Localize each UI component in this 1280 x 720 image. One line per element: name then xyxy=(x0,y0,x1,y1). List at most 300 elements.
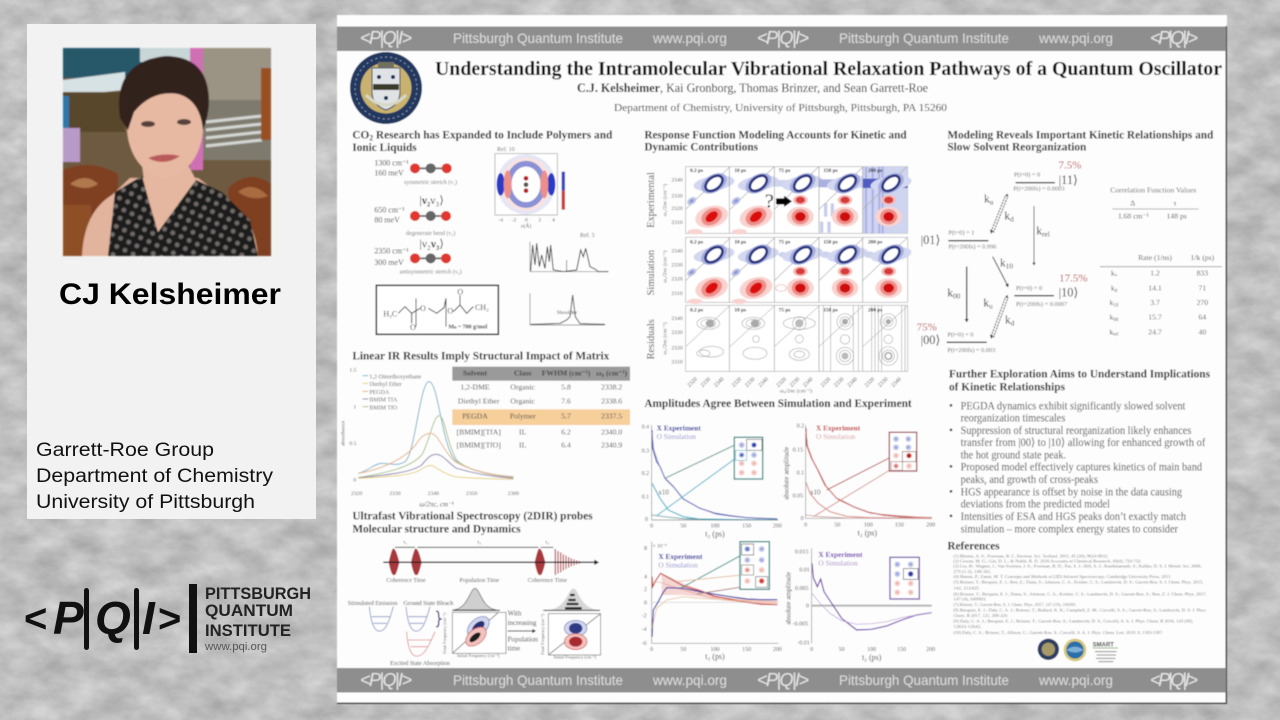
header band: Pittsburgh Quantum Institute xyxy=(453,30,623,46)
chart: IR absorbance spectra: 2330 xyxy=(389,491,401,497)
table: correlation function values xyxy=(1110,186,1198,220)
logo: Pittsburgh Quantum Institute: > xyxy=(158,597,181,641)
heading: further exploration: Further Exploration Aims to Understand Implications xyxy=(949,366,1210,380)
chart: IR absorbance spectra: Diethyl Ether xyxy=(369,382,402,388)
table: rate constants: d xyxy=(1115,289,1118,294)
header band: www.pqi.org xyxy=(1038,30,1113,46)
PEGDA structure box: H₃C xyxy=(383,310,397,319)
title: Understanding the Intramolecular Vibrational Relaxation Pathways of a Quantum Oscillator xyxy=(435,58,1222,80)
heading: 2DIR xyxy=(352,509,593,535)
bullet list: HGS appearance is offset by noise in the data causing xyxy=(961,486,1182,498)
panel: response function modeling xyxy=(644,127,912,395)
bullet list: the hot ground state peak. xyxy=(961,449,1066,461)
references list: (2) Cowan, M. G.; Gin, D. L.; & Noble, R. D. 2016 Accounts of Chemical Research, 49(4), 724-732. xyxy=(953,558,1142,564)
chart: Ref. 10 2D map xyxy=(495,146,565,229)
diagram: energy level scheme: |11⟩ xyxy=(1059,173,1078,187)
bullet list: Suppression of structural reorganization likely enhances xyxy=(961,425,1191,437)
table: solvent properties: IL xyxy=(519,427,527,436)
CO2 vibrational modes: 300 meV xyxy=(374,258,404,267)
chart: IR absorbance spectra: PEGDA xyxy=(369,390,390,396)
chart: red diagonal amplitudes: 0 xyxy=(801,516,804,522)
chart: purple amplitudes: X Experiment xyxy=(818,550,863,559)
table: rate constants: rel xyxy=(1113,333,1119,338)
row: residual 2D spectra: 2330 xyxy=(833,376,846,389)
PEGDA structure box: O xyxy=(420,304,426,313)
row: simulation 2D spectra: 2320 xyxy=(671,277,683,283)
chart: blue diagonal amplitudes: O Simulation xyxy=(657,432,696,441)
chart: 2D spectrum after xyxy=(540,588,601,660)
table: solvent properties xyxy=(452,367,630,450)
table: solvent properties: 2340.0 xyxy=(601,427,622,436)
chart: red diagonal amplitudes: 100 xyxy=(864,522,873,528)
row: residual 2D spectra: 200 ps xyxy=(868,307,882,313)
table: rate constants: 15.7 xyxy=(1148,313,1162,322)
chart: 2D spectrum before: Final Frequency (cm⁻¹) xyxy=(442,612,447,654)
references list: 12633-12642. xyxy=(953,624,982,629)
header band xyxy=(337,26,1226,51)
funder logos xyxy=(1038,639,1118,662)
chart: cross-peak amplitudes: × 10⁻³ xyxy=(653,544,667,550)
row: simulation 2D spectra: 10 ps xyxy=(734,239,746,245)
CO2 vibrational modes: 2350 cm⁻¹ xyxy=(374,247,409,256)
chart: Ref. 10 2D map: -2 xyxy=(512,217,517,223)
chart: red diagonal amplitudes: 0.05 xyxy=(793,494,803,500)
panel: amplitudes xyxy=(642,396,935,662)
diagram: energy level scheme: rel xyxy=(1042,229,1050,238)
annotation: question mark and arrow xyxy=(765,191,792,213)
funder logos: SMART xyxy=(1093,643,1114,649)
panel: poster xyxy=(337,15,1227,704)
chart: IR absorbance spectra: absorbance xyxy=(341,420,347,446)
diagram: 2DIR pulse sequence xyxy=(383,539,599,584)
chart: red diagonal amplitudes: 150 xyxy=(895,522,904,528)
row: residual 2D spectra: ω₃/2πc (cm⁻¹) xyxy=(780,388,812,395)
chart: IR absorbance spectra: 2360 xyxy=(508,491,519,497)
header band: www.pqi.org xyxy=(652,30,727,46)
table: solvent properties: ω₀ (cm⁻¹) xyxy=(596,369,628,378)
chart: cross-peak amplitudes: -4 xyxy=(642,627,647,633)
diagram: energy level scheme: 75% xyxy=(917,321,937,333)
chart: Ref. 5 spectrum (b) xyxy=(530,293,605,325)
references list: (8) Berquist, E. J.; Daly, C. A. J.; Brinzer, T.; Bullard, K. K.; Campbell, Z. M.; Corcelli, S. A.; Garrett-Roe, S.; Lambrecht, D. S. J. Phys. xyxy=(953,608,1207,614)
diagram: energy level scheme: k xyxy=(1036,225,1042,237)
table: rate constants: 71 xyxy=(1199,284,1206,293)
references list: (7) Brinzer, T.; Garrett-Roe, S. J. Chem. Phys. 2017, 147 (19), 194301. xyxy=(953,602,1077,608)
chart: purple amplitudes xyxy=(785,548,935,662)
chart: purple amplitudes: 0.015 xyxy=(795,549,808,555)
heading: CO2 research: 2 xyxy=(369,133,373,142)
table: solvent properties: 2340.9 xyxy=(601,441,622,450)
diagram: 2DIR pulse sequence: t₁ xyxy=(404,539,407,545)
bullet list: • xyxy=(949,486,953,498)
logo: Pittsburgh Quantum Institute: < xyxy=(24,597,47,641)
affiliation text xyxy=(36,440,274,513)
bullet list: Proposed model effectively captures kinetics of main band xyxy=(961,462,1202,474)
row labels: ω₁/2πc (cm⁻¹) xyxy=(662,322,669,354)
diagram: energy level scheme: k xyxy=(983,298,989,310)
table: solvent properties: Organic xyxy=(510,396,536,405)
PEGDA structure box xyxy=(376,285,498,334)
references list: Chem. B 2017, 121, 208-220. xyxy=(953,613,1008,619)
chart: IR absorbance spectra: BMIM TfA xyxy=(369,397,398,404)
diagram: 2DIR pulse sequence: t₂ xyxy=(478,539,481,545)
affiliation text: University of Pittsburgh xyxy=(36,492,255,513)
chart: red diagonal amplitudes: 200 xyxy=(926,522,935,528)
panel: linear IR xyxy=(341,348,630,667)
heading: kinetic model: Slow Solvent Reorganization xyxy=(947,140,1087,154)
logo: Pittsburgh Quantum Institute xyxy=(24,584,311,653)
diagram: energy level scheme: k xyxy=(1005,314,1011,326)
chart: cross-peak amplitudes: t₂ (ps) xyxy=(705,652,725,661)
diagram: energy level scheme: |01⟩ xyxy=(921,233,940,247)
panel: CO2 research xyxy=(352,127,613,334)
chart: blue diagonal amplitudes: 50 xyxy=(680,524,686,530)
logo: Pittsburgh Quantum Institute: QUANTUM xyxy=(205,601,293,620)
diagram: energy level scheme: |10⟩ xyxy=(1059,286,1078,300)
PEGDA structure box: O xyxy=(457,287,463,296)
chart: blue diagonal amplitudes: 0.3 xyxy=(642,448,649,454)
diagram: energy level scheme: u xyxy=(990,198,994,207)
affiliation text: Department of Chemistry xyxy=(36,466,274,487)
authors: C.J. Kelsheimer, Kai Gronborg, Thomas Brinzer, and Sean Garrett-Roe xyxy=(577,80,928,95)
chart: blue diagonal amplitudes: 0.1 xyxy=(642,494,649,500)
row labels: Simulation xyxy=(646,250,657,295)
table: rate constants: 14.1 xyxy=(1148,284,1162,293)
arrow: with increasing population time: increasing xyxy=(508,619,537,627)
table: rate constants: 3.7 xyxy=(1150,298,1160,307)
chart: purple amplitudes: 0.01 xyxy=(799,568,810,574)
header band: <P|Q|I> xyxy=(360,28,412,48)
chart: cross-peak amplitudes: 200 xyxy=(773,647,782,653)
table: rate constants: 00 xyxy=(1113,318,1119,323)
footer band: <P|Q|I> xyxy=(360,670,412,690)
table: solvent properties: 2338.6 xyxy=(601,396,622,405)
bullet list: • xyxy=(949,511,953,523)
chart: purple amplitudes: 100 xyxy=(867,647,876,653)
table: solvent properties: Solvent xyxy=(463,369,488,378)
diagram: 2DIR pulse sequence: Coherence Time xyxy=(528,578,567,584)
row: residual 2D spectra: 2330 xyxy=(789,376,801,389)
table: solvent properties: Class xyxy=(514,369,531,378)
PEGDA structure box: Mₙ ~ 700 g/mol xyxy=(448,324,488,330)
heading: CO2 research: Ionic Liquids xyxy=(352,140,417,154)
diagram: energy level scheme: 10 xyxy=(1006,262,1013,271)
diagram: energy level scheme: P(t=0) = 0 xyxy=(947,332,973,339)
row: residual 2D spectra: 2310 xyxy=(671,359,683,365)
chart: IR absorbance spectra: ω/2πc, cm⁻¹ xyxy=(419,501,454,509)
table: solvent properties: Diethyl Ether xyxy=(458,396,500,405)
header band: Pittsburgh Quantum Institute xyxy=(839,30,1009,46)
row: residual 2D spectra: 0.2 ps xyxy=(690,307,703,313)
chart: purple amplitudes: 50 xyxy=(839,647,845,653)
chart: cross-peak amplitudes: 2 xyxy=(644,587,647,593)
bullet list: PEGDA dynamics exhibit significantly slowed solvent xyxy=(961,400,1186,412)
heading: response function: Dynamic Contributions xyxy=(644,140,758,154)
heading: response function: Response Function Modeling Accounts for Kinetic and xyxy=(644,127,907,141)
header band: <P|Q|I> xyxy=(1150,28,1198,48)
row: simulation 2D spectra: 2340 xyxy=(671,249,683,255)
row: experimental 2D spectra: 2320 xyxy=(671,206,683,212)
row: residual 2D spectra: 150 ps xyxy=(823,307,838,313)
row: residual 2D spectra: 2320 xyxy=(776,376,788,389)
table: rate constants xyxy=(1100,253,1222,338)
CO2 vibrational modes xyxy=(374,159,462,276)
references list: (1) Rhoten, A. S.; Freeman, B. C. Environ. Sci. Technol. 2011, 45 (20), 8624-8632. xyxy=(953,553,1108,559)
chart: IR absorbance spectra: 1 xyxy=(353,404,356,410)
logo: Pittsburgh Quantum Institute: PITTSBURGH xyxy=(205,584,311,603)
chart: Ref. 10 2D map: 2 xyxy=(538,217,541,223)
row: residual 2D spectra: 2330 xyxy=(700,376,712,389)
footer band: <P|Q|I> xyxy=(1150,670,1198,690)
row: simulation 2D spectra xyxy=(671,237,912,304)
chart: cross-peak amplitudes: -2 xyxy=(642,614,647,620)
references list: (4) Hamm, P.; Zanni, M. T. Concepts and Methods of (2D) Infrared Spectroscopy; Cambridge University Press, 2011. xyxy=(953,574,1172,580)
row: residual 2D spectra: 2340 xyxy=(802,376,815,389)
table: solvent properties: 6.2 xyxy=(561,427,571,436)
table: solvent properties: IL xyxy=(519,441,527,450)
references list: 147 (4), 049903. xyxy=(953,597,987,603)
diagram: energy ladders: Excited State Absorption xyxy=(390,661,450,667)
diagram: energy level scheme: k xyxy=(1004,210,1010,222)
PEGDA structure box: O xyxy=(410,323,416,332)
chart: purple amplitudes: 0.005 xyxy=(795,586,808,592)
chart: cross-peak amplitudes: 0 xyxy=(650,647,653,653)
chart: red diagonal amplitudes: 0 xyxy=(804,522,807,528)
row: residual 2D spectra: 75 ps xyxy=(779,307,790,313)
table: rate constants: Rate (1/ns) xyxy=(1138,253,1172,262)
row labels: ω₁/2πc (cm⁻¹) xyxy=(662,184,669,216)
bullet list: • xyxy=(949,400,953,412)
CO2 vibrational modes: |ν₂ν₃⟩ xyxy=(420,195,444,207)
chart: purple amplitudes: 0 xyxy=(806,604,809,610)
chart: purple amplitudes: -0.005 xyxy=(793,622,808,628)
row: experimental 2D spectra: 75 ps xyxy=(779,168,790,174)
row: experimental 2D spectra: 10 ps xyxy=(734,168,746,174)
chart: Ref. 10 2D map: -4 xyxy=(498,217,503,223)
diagram: energy level scheme: P(t=200fs) = 0.003 xyxy=(947,347,995,354)
row: residual 2D spectra: 2320 xyxy=(820,376,832,389)
footer band: <P|Q|I> xyxy=(757,670,809,690)
chart: Ref. 10 2D map: 0 xyxy=(525,217,528,223)
panel: presenter card xyxy=(27,24,316,519)
chart: 2D spectrum after: Initial Frequency (cm⁻¹) xyxy=(554,655,597,660)
chart: IR absorbance spectra: BMIM TfO xyxy=(369,404,398,411)
table: solvent properties: 5.7 xyxy=(561,412,571,421)
presenter photo xyxy=(63,48,271,256)
table: solvent properties: 6.4 xyxy=(561,441,571,450)
references list: (3) Liu, H.; Wagner, J.; Van Swieten, J. S.; Freeman, B. D.; Pas, S. J.; Hill, A. J.; Kanikkannath, S.; Kalika, D. S. J. Memb. Sci. 2006, xyxy=(953,564,1202,570)
references list: 279 (1-2), 149-161. xyxy=(953,569,992,575)
bullet list: peaks, and growth of cross-peaks xyxy=(961,474,1098,486)
heading: CO2 research: CO xyxy=(352,127,370,141)
affiliation text: Garrett-Roe Group xyxy=(36,440,214,461)
references list: (5) Brinzer, T.; Berquist, E. J.; Ren, Z.; Dutta, S.; Johnson, C. A.; Krisher, C. S.; Lambrecht, D. S.; Garrett-Roe, S. J. Chem. Phys. 2015, xyxy=(953,579,1203,585)
chart: cross-peak amplitudes: 4 xyxy=(644,574,647,580)
row: simulation 2D spectra: 75 ps xyxy=(779,239,790,245)
heading: further exploration: of Kinetic Relationships xyxy=(949,380,1065,394)
chart: red diagonal amplitudes: 0.1 xyxy=(797,470,804,476)
diagram: energy level scheme: |00⟩ xyxy=(921,333,940,347)
diagram: energy level scheme xyxy=(917,159,1088,354)
footer band: Pittsburgh Quantum Institute xyxy=(839,672,1009,688)
table: rate constants: k xyxy=(1110,298,1113,307)
heading: further exploration xyxy=(949,366,1210,394)
table: correlation function values: Δ xyxy=(1130,198,1135,207)
bullet list: reorganization timescales xyxy=(961,413,1065,425)
chart: red diagonal amplitudes: t₂ (ps) xyxy=(858,528,877,537)
chart: cross-peak amplitudes: 50 xyxy=(680,647,686,653)
table: rate constants: k xyxy=(1111,284,1115,293)
row: residual 2D spectra: 2320 xyxy=(687,376,699,389)
chart: cross-peak amplitudes: 150 xyxy=(742,647,751,653)
chart: cross-peak amplitudes xyxy=(642,542,782,661)
logo: Pittsburgh Quantum Institute: P xyxy=(53,592,84,644)
bullet list: simulation – more complex energy states to consider xyxy=(961,523,1178,535)
diagram: energy level scheme: d xyxy=(1011,318,1015,327)
row: simulation 2D spectra: 2310 xyxy=(671,291,683,297)
chart: Ref. 5 spectrum (b): Shoulder xyxy=(557,310,577,316)
table: solvent properties: 2337.5 xyxy=(601,412,622,421)
CO2 vibrational modes: 1300 cm⁻¹ xyxy=(374,159,409,168)
chart: blue diagonal amplitudes: 200 xyxy=(773,524,782,530)
CO2 vibrational modes: 160 meV xyxy=(374,169,404,178)
icon: University of Pittsburgh seal xyxy=(350,52,422,124)
chart: IR absorbance spectra: 2320 xyxy=(351,491,362,497)
chart: Ref. 10 2D map: x(Å) xyxy=(521,221,531,229)
chart: cross-peak amplitudes: -6 xyxy=(642,641,647,647)
diagram: energy level scheme: d xyxy=(1010,214,1014,223)
chart: 2D spectrum after: Final Frequency (cm⁻¹) xyxy=(540,613,545,655)
table: rate constants: k xyxy=(1109,327,1113,336)
table: rate constants: 40 xyxy=(1199,327,1206,336)
table: rate constants: 64 xyxy=(1199,313,1206,322)
row: simulation 2D spectra: 0.2 ps xyxy=(690,239,703,245)
diagram: energy level scheme: P(t=200fs) = 0.0003 xyxy=(1013,186,1065,193)
table: correlation function values: τ xyxy=(1173,198,1177,207)
chart: cross-peak amplitudes: 100 xyxy=(711,647,719,653)
table: solvent properties: 5.8 xyxy=(561,382,571,391)
row: residual 2D spectra: 2330 xyxy=(877,376,890,389)
heading: kinetic model xyxy=(947,127,1214,154)
references list: (9) Daly, C. A. J.; Berquist, E. J.; Brinzer, T.; Garrett-Roe, S.; Lambrecht, D. S.; Corcelli, S. A. J. Phys. Chem. B 2016, 120 (49), xyxy=(953,619,1193,625)
chart: red diagonal amplitudes: 50 xyxy=(834,522,840,528)
row: experimental 2D spectra: 2330 xyxy=(671,193,683,199)
diagram: energy level scheme: P(t=200fs) = 0.996 xyxy=(948,244,996,251)
row: residual 2D spectra: 2320 xyxy=(864,376,876,389)
diagram: energy level scheme: 7.5% xyxy=(1059,159,1081,171)
chart: cross-peak amplitudes: X Experiment xyxy=(658,552,703,561)
table: solvent properties: 1,2-DME xyxy=(460,382,490,391)
PEGDA structure box: CH₂ xyxy=(475,303,489,312)
CO2 vibrational modes: antisymmetric stretch (ν₃) xyxy=(400,269,462,276)
row: residual 2D spectra: 10 ps xyxy=(734,307,746,313)
arrow: with increasing population time xyxy=(508,610,538,653)
diagram: energy level scheme: k xyxy=(947,288,953,300)
chart: blue diagonal amplitudes: X Experiment xyxy=(657,423,701,432)
table: rate constants: 1.2 xyxy=(1150,269,1160,278)
table: solvent properties: 7.6 xyxy=(561,396,571,405)
affiliation: Department of Chemistry, University of Pittsburgh, Pittsburgh, PA 15260 xyxy=(614,102,948,114)
diagram: energy level scheme: k xyxy=(1000,258,1006,270)
row: residual 2D spectra: 2340 xyxy=(758,376,770,389)
table: solvent properties: FWHM (cm⁻¹) xyxy=(542,369,591,378)
diagram: 2DIR pulse sequence: Coherence Time xyxy=(386,578,426,584)
presenter name: CJ Kelsheimer xyxy=(59,278,282,311)
arrow: with increasing population time: time xyxy=(508,645,520,653)
diagram: energy ladders xyxy=(348,601,453,667)
arrow: with increasing population time: With xyxy=(508,610,522,618)
row: simulation 2D spectra: 200 ps xyxy=(868,239,882,245)
diagram: 2DIR pulse sequence: t₃ xyxy=(546,539,549,545)
row: residual 2D spectra xyxy=(671,305,908,395)
chart: red diagonal amplitudes: O Simulation xyxy=(816,432,856,441)
chart: IR absorbance spectra: 0.5 xyxy=(349,441,357,447)
table: rate constants: 270 xyxy=(1197,298,1208,307)
chart: purple amplitudes: absolute amplitude xyxy=(785,572,793,625)
bullet list: • xyxy=(949,425,953,437)
row: experimental 2D spectra: 2310 xyxy=(671,220,683,226)
bullet list: Intensities of ESA and HGS peaks don’t exactly match xyxy=(961,511,1186,523)
chart: blue diagonal amplitudes: 150 xyxy=(742,524,751,530)
row: experimental 2D spectra: 0.2 ps xyxy=(690,168,703,174)
diagram: energy level scheme: 17.5% xyxy=(1059,273,1088,285)
diagram: energy level scheme: u xyxy=(989,302,993,311)
diagram: energy level scheme: P(t=200fs) = 0.0007 xyxy=(1016,301,1067,308)
row: experimental 2D spectra: 150 ps xyxy=(823,168,838,174)
heading: 2DIR: Molecular structure and Dynamics xyxy=(352,521,521,535)
CO2 vibrational modes: 650 cm⁻¹ xyxy=(374,205,405,214)
CO2 vibrational modes: symmetric stretch (ν₁) xyxy=(404,179,457,186)
row labels: Experimental xyxy=(646,172,657,228)
table: rate constants: k xyxy=(1110,313,1113,322)
chart: red diagonal amplitudes xyxy=(782,423,935,537)
chart: cross-peak amplitudes: 0 xyxy=(644,600,647,606)
chart: red diagonal amplitudes: 0.15 xyxy=(793,448,803,454)
row: experimental 2D spectra xyxy=(671,167,912,234)
chart: red diagonal amplitudes: absolute amplitude xyxy=(782,447,790,500)
chart: blue diagonal amplitudes: 0 xyxy=(645,517,648,523)
chart: IR absorbance spectra xyxy=(341,368,519,509)
diagram: energy level scheme: 00 xyxy=(953,292,961,301)
chart: blue diagonal amplitudes: x10 xyxy=(658,488,669,496)
references list: (6) Brinzer, T.; Berquist, E. J.; Dutta, S.; Johnson, C. A.; Krisher, C. S.; Lambrecht, D. S.; Garrett-Roe, S.; Ren, Z. J. Chem. Phys. 2017, xyxy=(953,591,1207,597)
chart: IR absorbance spectra: 2340 xyxy=(428,491,439,497)
diagram: energy level scheme: P(t=0) = 1 xyxy=(948,229,974,236)
row labels xyxy=(646,172,669,359)
table: rate constants: kᵤ xyxy=(1111,269,1118,278)
diagram: energy ladders: Ground State Bleach xyxy=(403,601,453,607)
references list xyxy=(953,553,1207,636)
bullet list: deviations from the predicted model xyxy=(961,499,1110,511)
chart: blue diagonal amplitudes: t₂ (ps) xyxy=(705,530,725,539)
chart: blue diagonal amplitudes: 100 xyxy=(711,524,719,530)
table: correlation function values: 148 ps xyxy=(1167,211,1187,220)
logo: Pittsburgh Quantum Institute: INSTITUTE xyxy=(205,621,291,640)
chart: red diagonal amplitudes: x10 xyxy=(810,488,821,496)
row: residual 2D spectra: 2340 xyxy=(671,316,683,322)
header band: <P|Q|I> xyxy=(757,28,809,48)
row: simulation 2D spectra: 2330 xyxy=(671,263,683,269)
diagram: energy level scheme: P(t=0) = 0 xyxy=(1016,285,1042,292)
heading: references: References xyxy=(947,540,1000,552)
chart: Ref. 10 2D map: Ref. 10 xyxy=(497,146,515,153)
table: rate constants: 1/k (ps) xyxy=(1191,253,1215,262)
references list: (10) Daly, C. A.; Brinzer, T.; Allison, C.; Garrett-Roe, S.; Corcelli, S. A. J. Phys. Chem. Lett. 2018, 9, 1393-1397. xyxy=(953,630,1163,636)
table: solvent properties: Organic xyxy=(510,382,536,391)
chart: IR absorbance spectra: 2350 xyxy=(466,491,477,497)
chart: red diagonal amplitudes: 0.2 xyxy=(797,424,804,430)
bullet list xyxy=(949,400,1206,535)
